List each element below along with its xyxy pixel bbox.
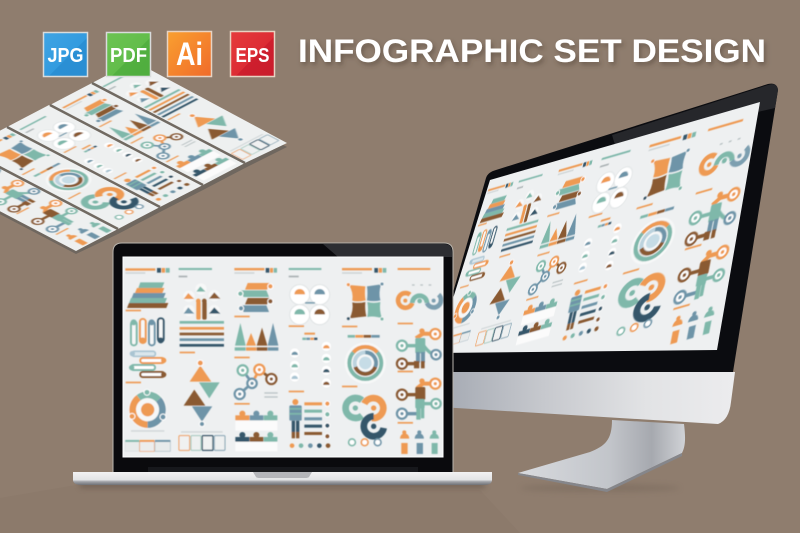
isometric sheet stack [0,61,287,254]
sheet: petals and donut [0,127,160,234]
laptop infographic column 6 [397,268,441,454]
monitor bezel [430,84,778,372]
icon: JPG [44,32,88,76]
monitor infographic column 3 [515,160,594,346]
laptop shadow [80,482,485,488]
laptop infographic column 5 [342,268,386,446]
laptop notch [253,472,312,478]
monitor stand [518,420,685,492]
monitor screen [436,102,760,353]
monitor infographic column 6 [666,116,755,346]
laptop infographic column 2 [179,268,225,450]
laptop infographic column 4 [289,268,331,448]
floor shading [0,485,520,533]
sheet: stacked bars and network [50,83,245,190]
laptop hinge strip [148,467,418,472]
laptop infographic column 3 [234,268,278,451]
title: INFOGRAPHIC SET DESIGN [298,33,766,69]
icon: Ai: Ai [176,36,203,72]
monitor infographic column 1 [443,182,514,347]
icon: JPG: JPG [48,45,84,67]
icon: PDF: PDF [110,45,147,67]
laptop screen [123,257,443,457]
icon: EPS [230,32,274,76]
icon: EPS: EPS [236,45,270,67]
sheet: people and bars [92,61,287,168]
laptop lid [113,243,453,473]
bezel reflection [612,84,778,145]
laptop base [73,472,492,485]
sheet: figures and bars [0,149,118,254]
icon: Ai [168,32,212,76]
desktop monitor [430,84,778,492]
monitor infographic column 2 [475,171,552,346]
laptop [73,243,492,488]
format icons [44,32,274,76]
monitor infographic column 4 [561,147,640,341]
monitor infographic column 5 [610,132,696,338]
lid reflection [323,244,452,257]
monitor chin [440,372,735,424]
sheet: circles and person [7,105,203,212]
icon: PDF [106,32,150,76]
laptop infographic column 1 [125,268,170,451]
